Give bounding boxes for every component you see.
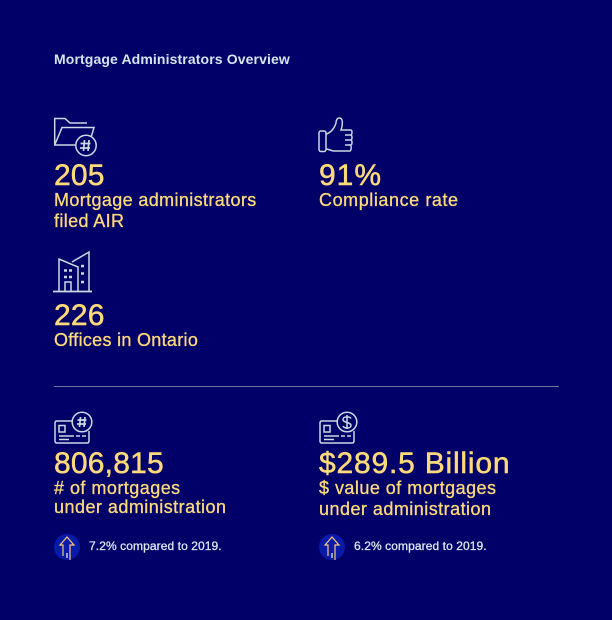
panel: dollar value of mortgages <box>319 412 510 560</box>
panel: compliance rate <box>318 117 459 210</box>
label: mortgage administrators filed AIR: Mortgage administrators <box>54 190 257 210</box>
divider <box>54 386 559 387</box>
panel: mortgage administrators filed AIR <box>54 118 257 231</box>
icon: up arrow <box>54 534 80 560</box>
label: offices in Ontario: Offices in Ontario <box>54 330 198 350</box>
stat: $289.5 Billion: $289.5 Billion <box>319 447 510 480</box>
icon: up arrow <box>319 534 345 560</box>
label: mortgage administrators filed AIR: filed AIR <box>54 211 124 231</box>
panel: offices in Ontario <box>53 250 198 350</box>
label: dollar value of mortgages under administration: under administration <box>319 498 492 518</box>
stat: 91%: 91% <box>319 159 382 192</box>
label: number of mortgages under administration <box>54 478 226 517</box>
text: comparison: 7.2% compared to 2019. <box>89 539 222 553</box>
icon: folder with number sign <box>54 118 97 156</box>
change: 6.2% compared to 2019 <box>319 534 487 560</box>
change: 7.2% compared to 2019 <box>54 534 222 560</box>
icon: card with dollar sign <box>319 412 358 444</box>
stat: 205: 205 <box>54 159 105 192</box>
label: compliance rate: Compliance rate <box>319 190 459 210</box>
panel: number of mortgages <box>54 412 226 560</box>
label: mortgage administrators filed AIR <box>54 190 257 231</box>
icon: thumbs up <box>318 117 353 152</box>
icon: card with number sign <box>54 412 93 444</box>
stat: 226: 226 <box>54 299 105 332</box>
stat: 806,815: 806,815 <box>54 447 164 480</box>
label: number of mortgages under administration: # of mortgages <box>54 478 181 498</box>
text: comparison: 6.2% compared to 2019. <box>354 539 487 553</box>
title: Mortgage Administrators Overview <box>54 51 290 67</box>
label: number of mortgages under administration: under administration <box>54 497 226 517</box>
icon: office buildings <box>53 250 92 292</box>
label: dollar value of mortgages under administration: $ value of mortgages <box>319 478 496 498</box>
label: dollar value of mortgages under administration <box>319 478 496 518</box>
